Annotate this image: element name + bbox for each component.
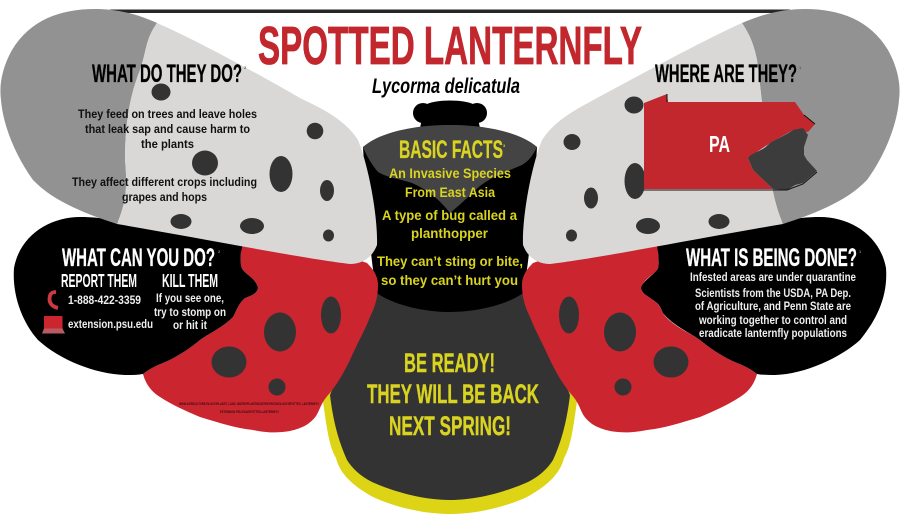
- body text: working together to control and: [698, 313, 847, 327]
- wing tip grey: [742, 9, 900, 224]
- heading: [92, 60, 247, 88]
- heading: 2: [244, 65, 247, 70]
- heading: WHAT CAN YOU DO?: [62, 244, 215, 272]
- title: SPOTTED LANTERNFLY: [258, 16, 642, 76]
- phone number: 1-888-422-3359: [68, 293, 141, 307]
- state label: PA: [709, 131, 730, 157]
- panel: left hind wing red: [143, 240, 378, 432]
- panel: what do they do: [0, 9, 377, 264]
- source citation: EXTENSION.PSU.EDU/SPOTTED-LANTERNFLY: [220, 410, 279, 414]
- callout: be ready: BE READY!: [404, 348, 495, 378]
- basic facts text: A type of bug called a: [382, 207, 517, 223]
- wing spots: [212, 296, 341, 396]
- abdomen: [330, 285, 570, 500]
- basic facts text: [377, 165, 523, 288]
- basic facts text: From East Asia: [405, 184, 495, 200]
- infested region: [748, 128, 817, 190]
- body text: of Agriculture, and Penn State are: [695, 299, 851, 313]
- panel: what is being done: [641, 217, 886, 375]
- kill them text: If you see one,: [156, 291, 224, 305]
- basic facts text: so they can’t hurt you: [381, 272, 518, 288]
- wing spots: [564, 96, 730, 242]
- basic facts heading: [399, 136, 506, 164]
- panel: where are they: [523, 9, 900, 264]
- body text: Scientists from the USDA, PA Dep.: [695, 286, 851, 300]
- callout: be ready: THEY WILL BE BACK: [367, 379, 539, 409]
- basic facts heading: BASIC FACTS: [399, 136, 503, 164]
- wing spots: [559, 296, 688, 396]
- head bumps: [413, 100, 487, 128]
- body text: [72, 107, 257, 204]
- source citation: [179, 402, 319, 414]
- subheading: kill them: KILL THEM: [162, 271, 218, 291]
- basic facts text: planthopper: [411, 225, 489, 241]
- wing light: [523, 23, 783, 264]
- state shape: [644, 94, 815, 189]
- heading: 2: [218, 249, 221, 254]
- body text: They affect different crops including: [72, 175, 257, 189]
- icon: telephone: [50, 292, 58, 308]
- subtitle: scientific name: Lycorma delicatula: [372, 75, 520, 98]
- subheading: report them: REPORT THEM: [61, 271, 137, 291]
- body text: Infested areas are under quarantine: [690, 270, 856, 284]
- heading: [62, 244, 221, 272]
- map shadow: [644, 94, 817, 190]
- basic facts text: An Invasive Species: [389, 165, 511, 181]
- body text: They feed on trees and leave holes: [78, 107, 257, 121]
- body text: grapes and hops: [122, 190, 207, 204]
- body text: the plants: [141, 137, 194, 151]
- panel: right hind wing red: [522, 240, 757, 432]
- callout: be ready: [367, 348, 539, 441]
- wing spots: [152, 84, 334, 242]
- icon: laptop: [42, 316, 65, 334]
- heading: 1: [859, 249, 862, 254]
- body text: that leak sap and cause harm to: [85, 122, 250, 136]
- source citation: WWW.AGRICULTURE.PA.GOV/PLANTS_LAND_WATER/PLANTINDUSTRY/ENTOMOLOGY/SPOTTED_LANTERNFLY: [179, 402, 319, 406]
- kill them text: [154, 291, 226, 332]
- kill them text: or hit it: [173, 318, 207, 332]
- heading: 1: [799, 65, 802, 70]
- map: Pennsylvania: [644, 94, 817, 190]
- basic facts heading: 3: [503, 143, 506, 148]
- head: [363, 125, 537, 213]
- kill them text: try to stomp on: [154, 305, 226, 319]
- heading: [655, 60, 802, 88]
- body text: [690, 270, 856, 340]
- website: extension.psu.edu: [68, 317, 153, 331]
- heading: WHERE ARE THEY?: [655, 60, 797, 88]
- wing tip grey: [0, 9, 157, 224]
- wing light: [117, 23, 377, 264]
- thorax: [363, 130, 537, 312]
- panel: what can you do: [14, 217, 258, 375]
- basic facts text: They can’t sting or bite,: [377, 253, 523, 269]
- panel: lanternfly body: [322, 100, 578, 514]
- body text: eradicate lanternfly populations: [699, 326, 847, 340]
- callout: be ready: NEXT SPRING!: [389, 411, 511, 441]
- abdomen yellow edge: [322, 300, 578, 514]
- heading: WHAT DO THEY DO?: [92, 60, 242, 88]
